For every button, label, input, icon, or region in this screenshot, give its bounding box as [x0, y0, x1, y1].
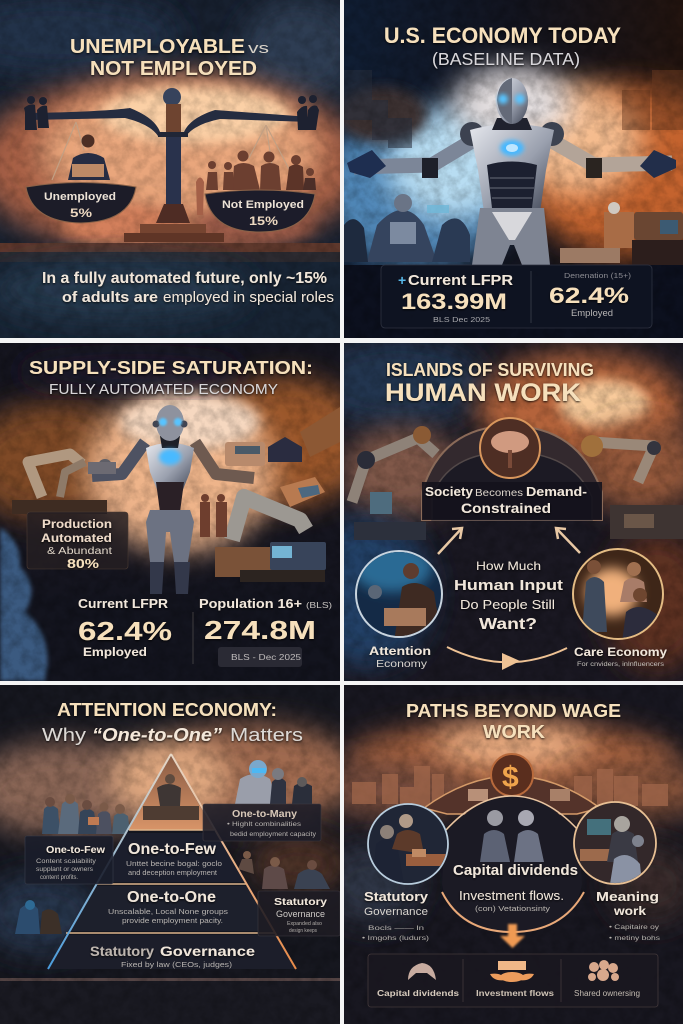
stat: current LFPR: Current LFPR [78, 596, 169, 611]
callout: production automated [27, 512, 128, 571]
label: meaning work: work [613, 904, 646, 918]
callout: statutory governance right: Statutory [274, 896, 327, 908]
title: Why [42, 725, 86, 745]
callout: one-to-many right: • Highlt combinalities [227, 821, 302, 828]
label: statutory governance [362, 890, 429, 942]
robot group right [235, 760, 312, 804]
arrow: bottom curved [447, 647, 567, 670]
label: care economy: For cnviders, inlnfluencers [577, 661, 665, 668]
arch with heading: Society [425, 484, 474, 499]
tier text: statutory governance: Statutory [90, 943, 154, 959]
label: attention economy [369, 646, 431, 670]
panel: supply-side saturation [0, 342, 370, 681]
title: UNEMPLOYABLE [70, 36, 245, 58]
icon: medallion brain tree [480, 418, 540, 478]
bottom box with three items: Investment flows [476, 988, 554, 998]
background robots and machines [344, 194, 683, 265]
central circle with capital dividends: Capital dividends [453, 863, 578, 879]
title [406, 700, 621, 742]
people group left [42, 794, 130, 834]
label: statutory governance: Bocls —— ln [368, 925, 425, 932]
panel: U.S. economy today [317, 0, 683, 338]
icon: investment flows [490, 961, 534, 982]
central circle with capital dividends [442, 796, 584, 932]
robot figure [347, 78, 676, 265]
left pan with label: 5% [70, 206, 92, 220]
title [42, 699, 303, 745]
central circle with capital dividends: Investment flows. [459, 889, 564, 903]
callout: production automated: & Abundant [47, 546, 112, 557]
tier text: statutory governance: Governance [160, 943, 255, 959]
title: FULLY AUTOMATED ECONOMY [49, 381, 278, 398]
circle: care economy [573, 549, 663, 642]
city skyline [352, 766, 668, 809]
arch with heading: Demand- [526, 484, 587, 499]
panel: paths beyond wage work [317, 684, 683, 1024]
stat: population: 274.8M [204, 615, 316, 645]
icon: capital dividends [408, 963, 436, 980]
panel: islands of surviving human work [344, 343, 683, 681]
stat: current LFPR: 62.4% [78, 616, 172, 646]
stats box: Denenation (15+) [564, 273, 631, 280]
robotic arms and machinery [352, 426, 683, 540]
title: ISLANDS OF SURVIVING [386, 360, 594, 380]
callout: production automated: Production [42, 519, 112, 531]
title [384, 23, 621, 69]
panel background glow [344, 343, 683, 681]
circle: meaning work scene [574, 802, 656, 884]
left pan with label [26, 182, 136, 223]
callout: statutory governance right: design keeps [289, 928, 317, 934]
central circle with capital dividends: (con) Vetationsinty [475, 904, 550, 913]
panel: unemployable vs not employed [0, 0, 365, 338]
icon: dollar coin [491, 754, 533, 796]
callout: one-to-many right: bedid employment capacity [230, 831, 317, 838]
panel background glow [317, 0, 683, 338]
right pan with label: 15% [249, 214, 278, 228]
stat: current LFPR [78, 596, 172, 659]
icon: silhouettes on beam ends [24, 95, 319, 130]
title [30, 361, 312, 396]
callout: one-to-few left: content profits. [40, 874, 78, 881]
title: SUPPLY-SIDE SATURATION: [29, 357, 313, 378]
stat: population: Population 16+ [199, 596, 302, 611]
workers [200, 494, 227, 537]
callout: one-to-few left: One-to-Few [46, 845, 105, 856]
title: HUMAN WORK [385, 379, 581, 407]
stats box: 163.99M [401, 289, 507, 314]
tier text: one-to-one [108, 889, 228, 925]
stats box: 62.4% [549, 283, 629, 308]
tier text: one-to-few: and deception employment [128, 868, 218, 877]
robot figure [88, 405, 254, 594]
central question: Human Input [454, 577, 563, 594]
title: U.S. ECONOMY TODAY [384, 23, 621, 48]
label: statutory governance: Statutory [364, 890, 428, 904]
panel background glow [0, 684, 360, 1024]
arrow: right up [556, 528, 580, 553]
right pan with label: Not Employed [222, 199, 304, 211]
central question: How Much [476, 559, 541, 573]
title: (BASELINE DATA) [432, 49, 580, 69]
callout: one-to-few left [25, 836, 113, 884]
title [70, 39, 268, 78]
callout: one-to-few left: supplant or owners [36, 866, 94, 873]
tier text: one-to-few: Unttet becine bogal: goclo [126, 859, 222, 868]
label: statutory governance: Governance [364, 906, 428, 918]
label: meaning work: • Capitaire oy [609, 924, 660, 931]
tier text: one-to-one: Unscalable, Local None groups [108, 907, 228, 916]
stat: current LFPR: Employed [83, 645, 147, 659]
callout: statutory governance right: Expanded also [287, 921, 322, 927]
tier text: one-to-one: One-to-One [127, 889, 216, 906]
label: meaning work [596, 890, 661, 942]
title: PATHS BEYOND WAGE [406, 700, 621, 721]
stat: population [193, 596, 332, 667]
stats box: Employed [571, 308, 613, 318]
tier text: one-to-one: provide employment pacity. [122, 916, 223, 925]
stats box [381, 265, 652, 328]
icon: balance scale [28, 88, 310, 242]
bottom box with three items: Shared ownersing [574, 989, 640, 998]
icon: dollar coin: $ [502, 761, 519, 794]
label: care economy: Care Economy [574, 645, 667, 659]
caption: of adults are [62, 289, 158, 306]
label: meaning work: • metiny bohs [609, 935, 661, 942]
callout: statutory governance right: Governance [276, 909, 325, 920]
callout: one-to-few left: Content scalability [36, 858, 97, 865]
caption [42, 270, 334, 306]
dome arch [424, 776, 600, 814]
stats box: Current LFPR [408, 272, 513, 289]
bottom box with three items: Capital dividends [377, 988, 459, 998]
title: ATTENTION ECONOMY: [57, 699, 277, 720]
central question: Want? [479, 616, 537, 633]
title: NOT EMPLOYED [90, 58, 257, 80]
arch with heading: Constrained [461, 501, 551, 516]
callout: statutory governance right [258, 891, 340, 936]
label: attention economy: Economy [376, 658, 428, 670]
tier text: statutory governance [90, 943, 255, 969]
callout: one-to-many right [203, 804, 321, 841]
circle: attention economy [355, 550, 443, 638]
central question: Do People Still [460, 598, 555, 612]
arch with heading: Becomes [475, 488, 523, 499]
bottom box with three items [368, 954, 658, 1007]
stat: population: (BLS) [306, 600, 332, 610]
title: “One-to-One” [92, 725, 222, 745]
tier text: statutory governance: Fixed by law (CEOs, judges) [121, 960, 233, 969]
arch with heading [422, 426, 602, 520]
label: statutory governance: • Imgohs (ludurs) [362, 935, 429, 942]
caption: employed in special roles [163, 289, 334, 306]
circle: statutory governance scene [368, 804, 448, 884]
pyramid [48, 754, 296, 969]
label: attention economy: Attention [369, 646, 431, 658]
icon: shared ownership [588, 960, 619, 981]
left pan with label: Unemployed [44, 191, 116, 203]
panel background glow [0, 0, 365, 338]
panel background glow [0, 342, 370, 681]
panel background glow [317, 684, 683, 1024]
label: meaning work: Meaning [596, 890, 659, 904]
figure: unemployed person with box [68, 134, 110, 180]
figures left lower [15, 900, 62, 934]
callout: production automated: 80% [67, 556, 100, 571]
stats box: BLS Dec 2025 [433, 315, 490, 324]
tier text: one-to-few [126, 841, 222, 877]
caption: In a fully automated future, only ~15% [42, 270, 327, 287]
stats box: + [398, 272, 406, 288]
tier text: one-to-few: One-to-Few [128, 841, 217, 858]
robotic arm left [12, 454, 112, 514]
figure: crowd silhouettes [196, 150, 316, 215]
title: WORK [483, 721, 546, 742]
title: Matters [230, 725, 303, 745]
central question [454, 559, 563, 633]
arrow: left up [438, 528, 462, 554]
people right middle [238, 851, 330, 889]
right pan with label [205, 190, 315, 232]
arrow: down [500, 924, 525, 948]
title: vs [248, 40, 269, 57]
title [386, 362, 594, 404]
panel: attention economy pyramid [0, 684, 360, 1024]
vehicles and machines right [215, 407, 340, 582]
callout: production automated: Automated [41, 533, 112, 545]
label: care economy [574, 645, 667, 668]
stat: population: BLS - Dec 2025 [231, 652, 301, 662]
callout: one-to-many right: One-to-Many [232, 809, 297, 820]
